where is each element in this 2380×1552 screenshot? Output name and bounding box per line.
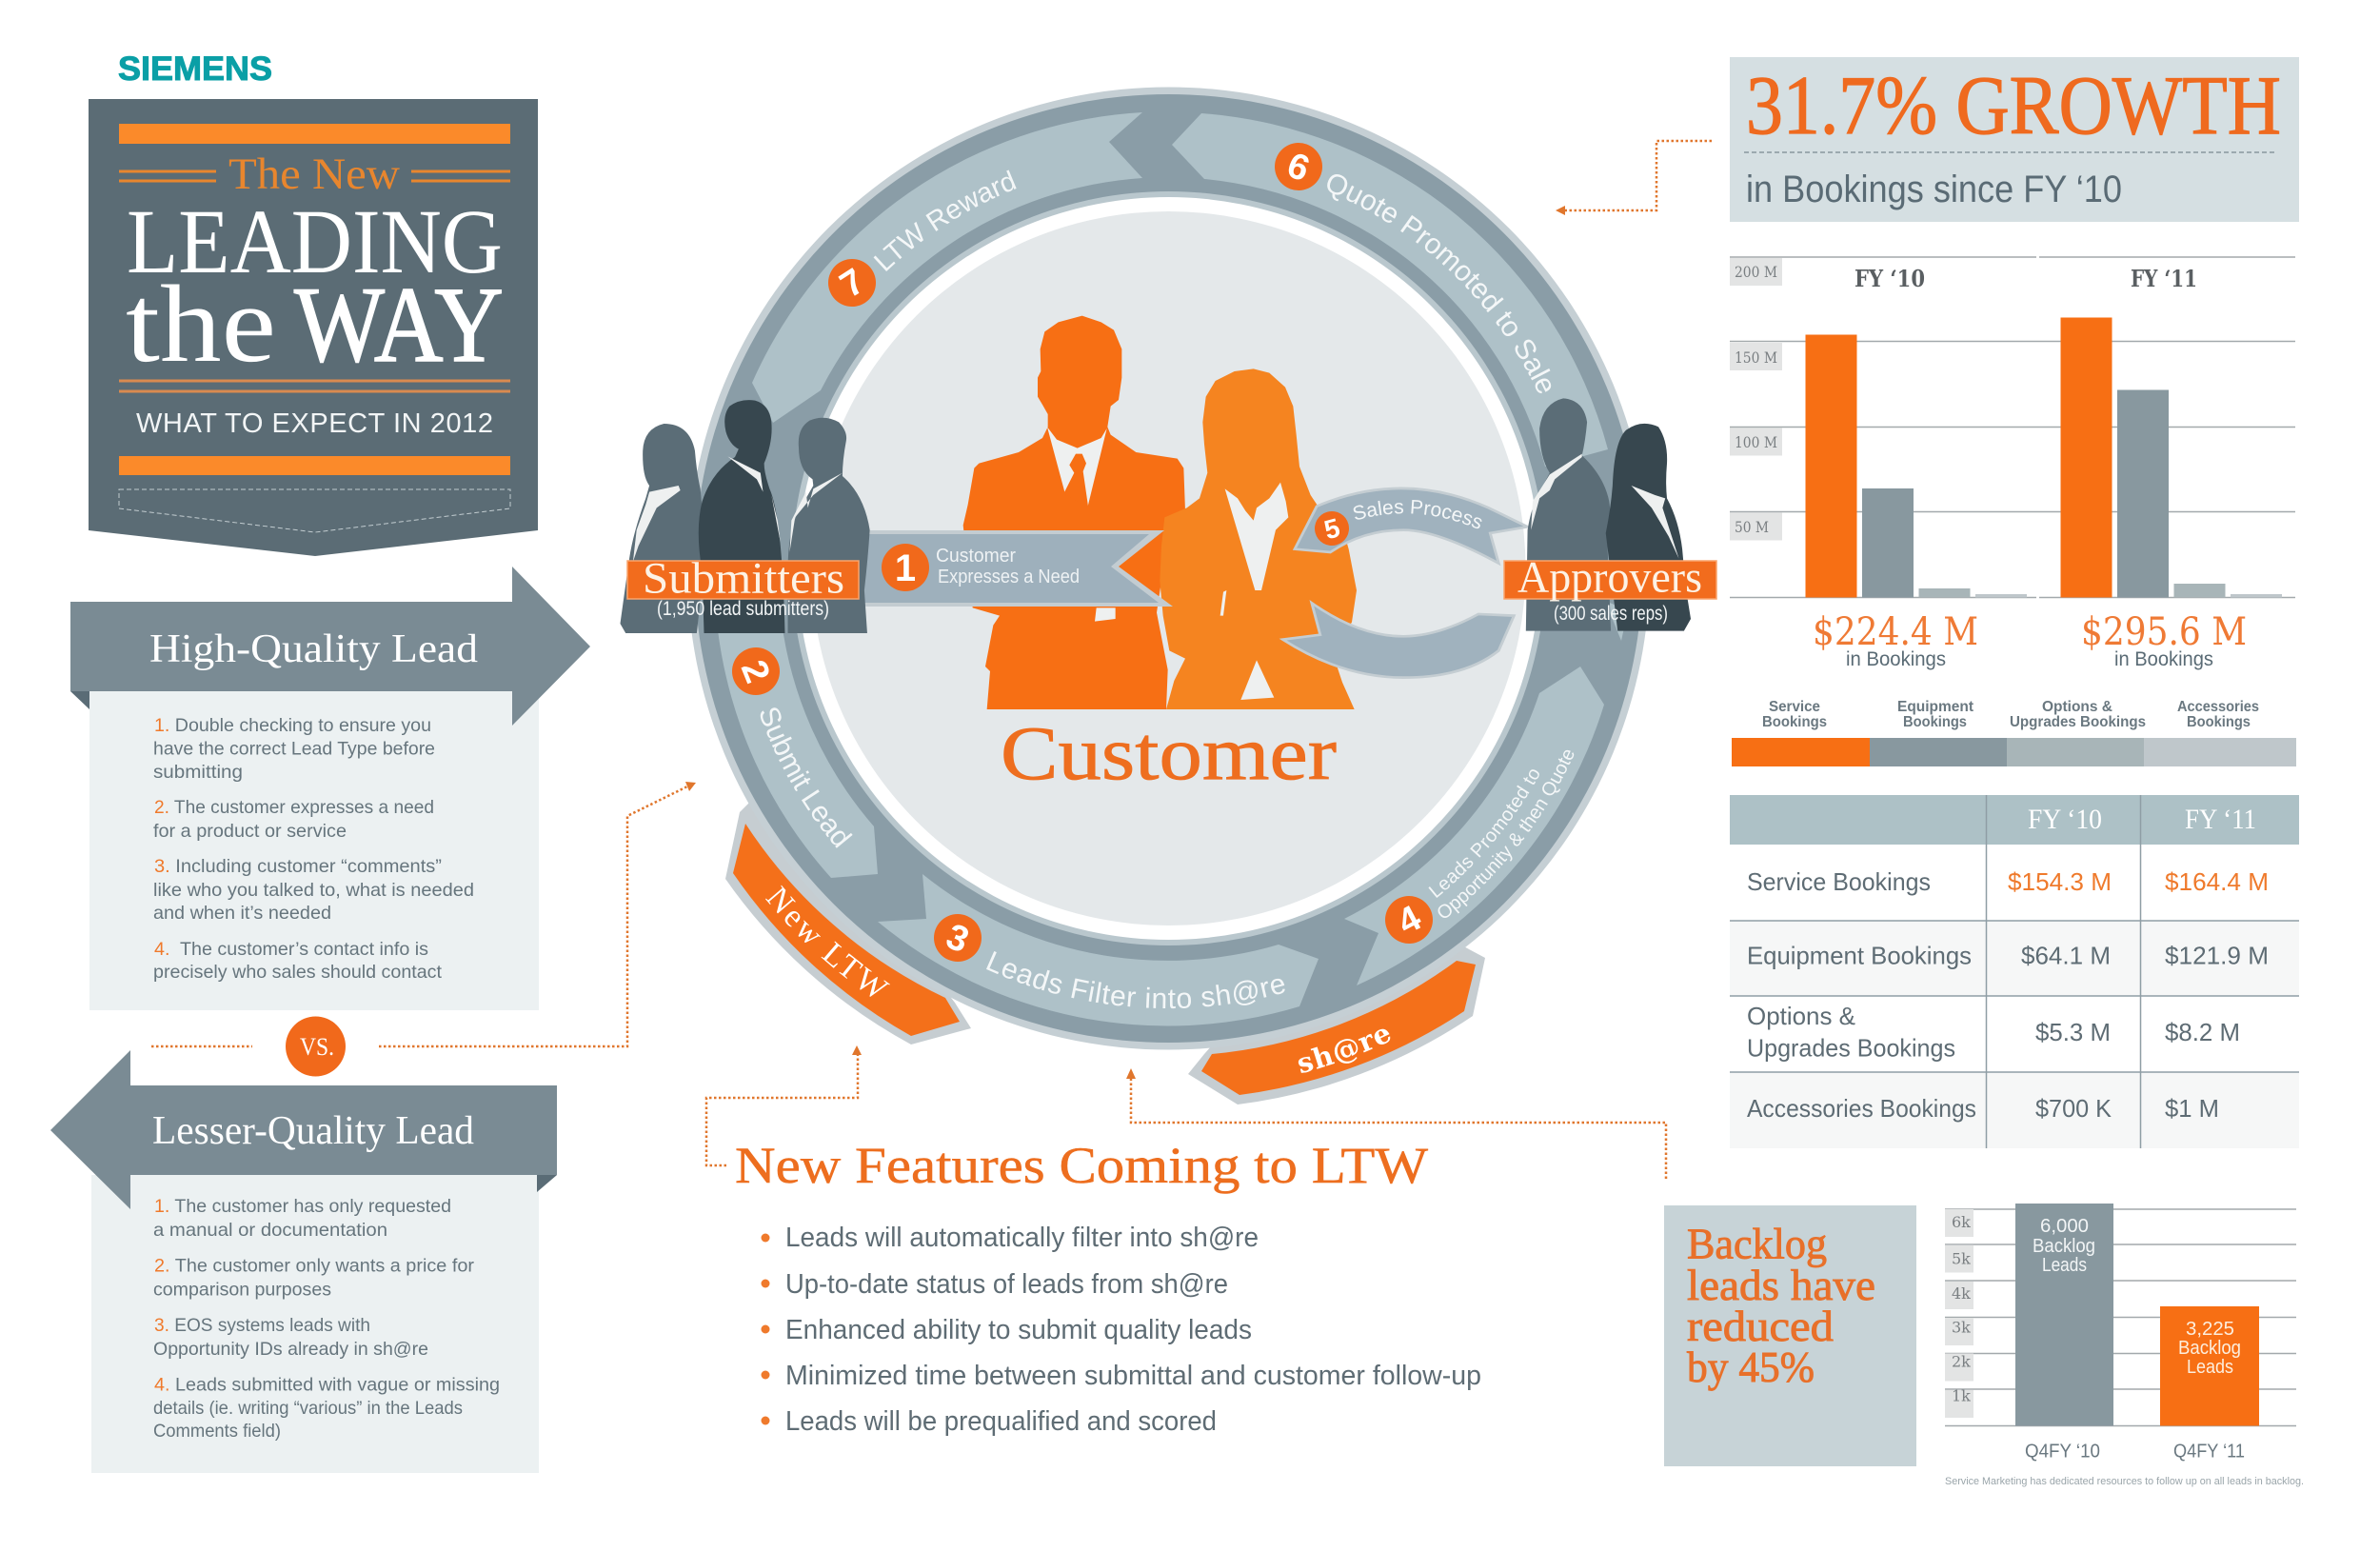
list: lesser-quality items: 3. EOS systems leads with [154, 1315, 370, 1336]
label: Leads Filter into sh@re: Leads Filter into sh@re [986, 951, 1285, 1009]
list: lesser-quality items: 4. Leads submitted with vague or missing [154, 1375, 500, 1396]
list: lesser-quality items: Opportunity IDs already in sh@re [153, 1339, 428, 1360]
badge 3 [926, 906, 989, 969]
list: high-quality items: submitting [153, 762, 243, 783]
axis labels: 1k [1952, 1386, 1971, 1405]
step badges [724, 136, 1441, 969]
bar chart: bookings [1730, 257, 2295, 670]
footnote: Service Marketing has dedicated resources to follow up on all leads in backlog. [1945, 1476, 2304, 1487]
heading: new features: New Features Coming to LTW [735, 1137, 1428, 1194]
axis labels: 150 M [1735, 348, 1777, 367]
title banner: the [126, 264, 276, 386]
banner: New LTW [725, 800, 971, 1045]
ring segment 4 [1344, 667, 1604, 985]
axis labels: 2k [1952, 1352, 1971, 1371]
list: high-quality items: 3. Including customer “comments” [154, 856, 442, 877]
row: equipment [1747, 941, 2269, 969]
bar Q4 FY11: 3,225 [2186, 1319, 2234, 1340]
panel: backlog callout [1664, 1205, 1916, 1466]
ring segment 6 [1172, 113, 1608, 467]
axis labels [1730, 258, 1782, 541]
step 1 arrow: Customer [936, 546, 1016, 567]
heading: Customer: Customer [1001, 712, 1337, 796]
list: high-quality items: 4. The customer’s contact info is [154, 939, 428, 960]
legend: Bookings [1903, 714, 1967, 730]
label: Leads Promoted to: Leads Promoted to [1428, 769, 1539, 898]
badge 3: 3 [941, 916, 974, 961]
logo: Siemens: SIEMENS [118, 50, 272, 88]
row: equipment: Equipment Bookings [1747, 941, 1972, 969]
label: Quote Promoted to Sale: Quote Promoted to Sale [1327, 174, 1552, 394]
panel: backlog callout: Backlog [1687, 1219, 1827, 1268]
bar chart: bookings: FY ‘11 [2131, 265, 2197, 292]
arrow: dotted connector vs to ring [379, 782, 696, 1046]
legend: Options & [2042, 699, 2112, 715]
label: Opportunity and then Quote: Opportunity & then Quote [1438, 750, 1575, 918]
table: bookings by year: FY ‘11 [2185, 804, 2256, 835]
total FY10 [1813, 610, 1978, 670]
arrow: dotted connector growth to ring [1556, 141, 1712, 215]
arrow: lesser-quality lead heading [50, 1050, 557, 1209]
list: high-quality items: for a product or service [153, 821, 347, 842]
row: options: Options & [1747, 1002, 1855, 1030]
axis labels: 100 M [1735, 433, 1777, 451]
row: accessories: $1 M [2165, 1094, 2219, 1123]
ring segment 2 [718, 622, 878, 878]
step 1 arrow [857, 530, 1173, 607]
ring segments [718, 112, 1628, 1026]
row: accessories: $700 K [2035, 1094, 2112, 1123]
heading: high-quality lead: High-Quality Lead [149, 627, 478, 671]
title banner: The New [228, 149, 400, 199]
panel: growth callout: 31.7% GROWTH [1746, 60, 2281, 152]
step 5 sales process arrows [1282, 488, 1528, 678]
label: New LTW: New LTW [765, 885, 890, 997]
list: high-quality items: have the correct Lead Type before [153, 739, 435, 760]
bar Q4 FY11 [2160, 1306, 2259, 1426]
column headers: FY ‘10 [1854, 265, 1925, 292]
axis labels: 50 M [1735, 518, 1769, 536]
step 1 arrow: Expresses a Need [938, 567, 1080, 587]
list: new features: Minimized time between submittal and customer follow-up [785, 1361, 1481, 1391]
axis labels: 5k [1952, 1249, 1971, 1268]
panel: backlog callout: leads have [1687, 1261, 1875, 1309]
label: Approvers [1504, 552, 1716, 625]
panel: growth callout: in Bookings since FY ‘10 [1746, 169, 2122, 210]
list: high-quality items: 2. The customer expresses a need [154, 797, 434, 818]
vs divider: VS. [300, 1033, 334, 1061]
list: lesser-quality items: details (ie. writing “various” in the Leads [153, 1398, 463, 1419]
bars FY11 [2060, 318, 2282, 598]
label: Approvers: (300 sales reps) [1554, 603, 1668, 625]
bar Q4 FY11: Backlog [2178, 1338, 2241, 1359]
axis captions [2025, 1442, 2245, 1462]
total FY11: in Bookings [2114, 648, 2213, 670]
process ring [691, 88, 1646, 1073]
badge 7 [819, 249, 885, 316]
panel: growth callout [1730, 57, 2299, 222]
axis labels: 200 M [1735, 263, 1777, 281]
axis captions: Q4FY ‘10 [2025, 1442, 2100, 1462]
badge 4: 4 [1391, 898, 1428, 943]
title banner [89, 99, 538, 556]
axis labels [1945, 1209, 1973, 1418]
axis labels: 3k [1952, 1318, 1971, 1337]
total FY10: in Bookings [1846, 648, 1946, 670]
list: high-quality items: 1. Double checking to ensure you [154, 715, 431, 736]
row: equipment: $64.1 M [2021, 941, 2111, 969]
legend: Equipment [1897, 699, 1973, 715]
total FY10: $224.4 M [1813, 610, 1978, 654]
panel: backlog callout: reduced [1687, 1302, 1834, 1350]
row: service [1747, 867, 2269, 896]
row: options: Upgrades Bookings [1747, 1034, 1955, 1063]
row: accessories: Accessories Bookings [1747, 1094, 1976, 1123]
panel: high-quality lead [70, 567, 590, 1010]
label: Sales Process: Sales Process [1354, 500, 1481, 529]
bar Q4 FY10: 6,000 [2040, 1216, 2089, 1237]
banner: sh@re [1188, 943, 1485, 1104]
row: equipment: $121.9 M [2165, 941, 2269, 969]
list: high-quality items: and when it’s needed [153, 903, 331, 924]
list: lesser-quality items: 2. The customer only wants a price for [154, 1255, 475, 1276]
vs divider [151, 1017, 346, 1076]
ring segment 6 tail tip [1605, 601, 1628, 641]
list: lesser-quality items: Comments field) [153, 1421, 281, 1442]
arrow: dotted connector features to New LTW [706, 1045, 862, 1165]
axis labels: 6k [1952, 1213, 1971, 1231]
bar Q4 FY10: Leads [2042, 1255, 2087, 1276]
figure: customer woman [1160, 368, 1357, 709]
total FY11: $295.6 M [2081, 610, 2247, 654]
list: high-quality items: precisely who sales should contact [153, 962, 443, 983]
axis labels: 4k [1952, 1284, 1971, 1303]
row: service: $154.3 M [2008, 867, 2112, 896]
list: new features [762, 1223, 1481, 1437]
label: sh@re: sh@re [1299, 1028, 1390, 1073]
bar Q4 FY10: Backlog [2033, 1236, 2095, 1257]
figures: approvers group [1526, 398, 1691, 631]
badge 4 [1377, 887, 1441, 952]
list: lesser-quality items: comparison purposes [153, 1280, 331, 1301]
bar chart: backlog [1945, 1204, 2296, 1462]
list: lesser-quality items: 1. The customer has only requested [154, 1196, 451, 1217]
total FY11 [2081, 610, 2247, 670]
arrow: dotted connector backlog to sh@re [1126, 1068, 1666, 1179]
legend: Service [1769, 699, 1820, 715]
list: new features: Enhanced ability to submit quality leads [785, 1315, 1252, 1345]
row: options: $5.3 M [2035, 1018, 2111, 1046]
badge 2 [724, 640, 787, 703]
bars FY10 [1805, 335, 2027, 598]
arrow: high-quality lead heading [70, 567, 590, 726]
legend: Bookings [2187, 714, 2251, 730]
row: service: Service Bookings [1747, 867, 1931, 896]
badge 2: 2 [733, 655, 778, 688]
figure: customer man [963, 316, 1187, 709]
title banner: LEADING [127, 190, 503, 292]
list: high-quality items [153, 715, 474, 983]
label: Submitters [627, 554, 859, 620]
list: lesser-quality items [153, 1196, 500, 1442]
list: lesser-quality items: a manual or documentation [153, 1220, 387, 1241]
badge 7: 7 [833, 261, 872, 306]
badge 6: 6 [1282, 146, 1315, 189]
row: service: $164.4 M [2165, 867, 2269, 896]
heading: lesser-quality lead: Lesser-Quality Lead [152, 1109, 474, 1153]
badge 6 [1268, 136, 1329, 197]
label: LTW Reward: LTW Reward [874, 169, 1017, 271]
bar Q4 FY10 [2015, 1204, 2113, 1426]
label: Approvers: Approvers [1517, 552, 1702, 602]
legend: Accessories [2177, 699, 2259, 715]
ring labels [760, 169, 1575, 1073]
row: accessories [1747, 1094, 2219, 1123]
title banner: WHAT TO EXPECT IN 2012 [136, 408, 493, 439]
panel: backlog callout: by 45% [1687, 1343, 1815, 1391]
table: bookings by year [1730, 795, 2299, 1148]
step 1 arrow: 1 [895, 547, 916, 589]
list: new features: Leads will be prequalified and scored [785, 1406, 1217, 1437]
legend [1732, 699, 2296, 766]
legend: Upgrades Bookings [2010, 714, 2146, 730]
table: bookings by year: FY ‘10 [2028, 804, 2102, 835]
legend: Bookings [1762, 714, 1827, 730]
badge 5 [1311, 507, 1353, 549]
ring segment 7 [752, 112, 1142, 423]
label: Submitters: Submitters [643, 554, 844, 604]
heading: new features [706, 1045, 1428, 1194]
figures: submitters group [620, 400, 870, 633]
ring segment 3 [878, 874, 1319, 1026]
badge 5: 5 [1321, 512, 1343, 545]
bar Q4 FY11: Leads [2187, 1357, 2233, 1378]
row: options [1747, 1002, 2240, 1063]
label: Submitters: (1,950 lead submitters) [657, 598, 829, 620]
row: options: $8.2 M [2165, 1018, 2240, 1046]
axis captions: Q4FY ‘11 [2173, 1442, 2245, 1462]
list: high-quality items: like who you talked to, what is needed [153, 880, 474, 901]
title banner: WAY [294, 266, 504, 385]
list: new features: Leads will automatically filter into sh@re [785, 1223, 1259, 1253]
list: new features: Up-to-date status of leads from sh@re [785, 1269, 1228, 1300]
panel: lesser-quality lead [50, 1050, 557, 1473]
label: Submit Lead: Submit Lead [760, 707, 853, 848]
